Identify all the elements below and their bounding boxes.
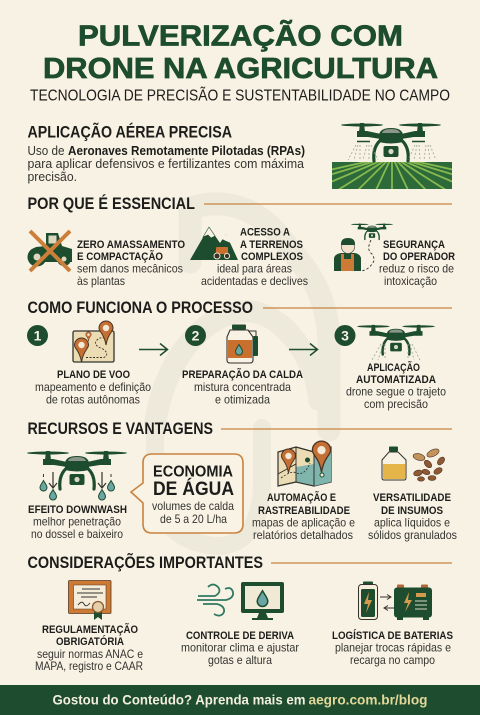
text: logística de baterias (332, 629, 453, 667)
step 3 number: 3 (341, 328, 349, 344)
text: aplicação automatizada: drone segue o trajeto (346, 384, 446, 398)
text: zero amassamento: E COMPACTAÇÃO (77, 250, 163, 263)
panel: aplicação aérea precisa (28, 122, 480, 190)
text: preparação da calda: mistura concentrada (194, 380, 291, 394)
arrow (289, 344, 318, 356)
text: versatilidade de insumos (368, 492, 457, 542)
footer banner: Gostou do Conteúdo? Aprenda mais em (52, 692, 306, 708)
text: efeito downwash: no dossel e baixeiro (31, 527, 123, 541)
text: efeito downwash (28, 504, 127, 541)
heading: CONSIDERAÇÕES IMPORTANTES (28, 552, 263, 572)
step 3 number (334, 325, 356, 346)
text: regulamentação (35, 623, 143, 673)
text: segurança do operador: SEGURANÇA (383, 239, 445, 251)
text: zero amassamento: às plantas (77, 274, 125, 288)
step 1 number: 1 (34, 328, 42, 344)
text: versatilidade de insumos: DE INSUMOS (381, 505, 443, 517)
panel: considerações importantes (28, 552, 453, 673)
text: preparação da calda: PREPARAÇÃO DA CALDA (182, 368, 303, 381)
icon: batteries and charger (358, 582, 432, 620)
text: automação e rastreabilidade: RASTREABILIDADE (258, 505, 350, 517)
text: automação e rastreabilidade: AUTOMAÇÃO E (267, 491, 336, 504)
footer banner: aegro.com.br/blog (308, 692, 428, 708)
text: efeito downwash: melhor penetração (33, 514, 121, 528)
icon: drone spraying field (332, 123, 452, 189)
text: logística de baterias: recarga no campo (350, 653, 435, 667)
title (43, 18, 438, 85)
text: aplicação automatizada: AUTOMATIZADA (356, 374, 436, 386)
text: aplicação automatizada: APLICAÇÃO (367, 361, 420, 374)
text: segurança do operador (379, 239, 455, 288)
heading: RECURSOS E VANTAGENS (28, 419, 213, 438)
text: aplicação automatizada: com precisão (364, 397, 428, 411)
icon: certificate (68, 580, 111, 620)
text block: para aplicar defensivos e fertilizantes com máxima (28, 156, 305, 171)
step 1 number (27, 325, 48, 346)
icon: monitor with drop (241, 582, 284, 620)
watermark: leaf (155, 204, 329, 546)
icon: wind (197, 584, 233, 616)
text block (28, 143, 305, 184)
heading: COMO FUNCIONA O PROCESSO (28, 298, 253, 317)
text: zero amassamento: ZERO AMASSAMENTO (77, 239, 185, 251)
text: zero amassamento (77, 239, 185, 288)
text: controle de deriva: gotas e altura (208, 653, 272, 667)
text: preparação da calda: e otimizada (215, 392, 270, 406)
title: PULVERIZAÇÃO COM (78, 18, 403, 52)
text: preparação da calda (182, 368, 303, 406)
text: acesso a terrenos (201, 226, 308, 288)
text: acesso a terrenos: ideal para áreas (217, 262, 292, 276)
text: controle de deriva: monitorar clima e ajustar (181, 640, 299, 654)
text: plano de voo (35, 369, 151, 406)
callout: economia de água: volumes de calda (152, 499, 234, 513)
text: acesso a terrenos: COMPLEXOS (241, 251, 303, 263)
text: versatilidade de insumos: sólidos granulados (368, 528, 457, 542)
text: segurança do operador: reduz o risco de (379, 262, 454, 276)
icon: mountains with tractor (190, 227, 238, 260)
text block: Uso de (28, 143, 64, 158)
text: zero amassamento: sem danos mecânicos (77, 262, 183, 276)
text: controle de deriva (181, 630, 299, 667)
text: regulamentação: REGULAMENTAÇÃO (42, 623, 138, 636)
icon: spray mix bottle (227, 324, 258, 363)
text: logística de baterias: LOGÍSTICA DE BATERIAS (332, 629, 453, 642)
callout: economia de água: DE ÁGUA (153, 477, 234, 500)
footer banner (0, 685, 480, 715)
step 2 number: 2 (192, 328, 200, 344)
text: acesso a terrenos: acidentadas e declives (201, 274, 308, 288)
text: plano de voo: mapeamento e definição (35, 380, 151, 394)
text: acesso a terrenos: ACESSO A (240, 226, 290, 238)
callout: economia de água: ECONOMIA (153, 464, 233, 480)
panel: como funciona o processo (27, 298, 452, 411)
title: DRONE NA AGRICULTURA (43, 53, 438, 85)
text: efeito downwash: EFEITO DOWNWASH (28, 504, 127, 516)
heading: APLICAÇÃO AÉREA PRECISA (28, 122, 232, 142)
text: automação e rastreabilidade: mapas de aplicação e (252, 516, 355, 530)
icon: flight plan map (73, 321, 114, 362)
text: regulamentação: OBRIGATÓRIA (56, 635, 124, 648)
arrow (139, 344, 168, 356)
panel: recursos e vantagens (27, 419, 457, 542)
icon: jug and granules (382, 446, 446, 481)
text: automação e rastreabilidade (252, 491, 355, 542)
icon: spraying drone (357, 325, 435, 360)
panel: por que é essencial (28, 194, 455, 288)
text: acesso a terrenos: A TERRENOS (240, 239, 303, 251)
text: controle de deriva: CONTROLE DE DERIVA (186, 630, 294, 642)
text: plano de voo: PLANO DE VOO (57, 369, 130, 381)
icon: crossed-out tractor (28, 231, 72, 271)
icon: downwash drone (27, 451, 127, 500)
step 2 number (185, 325, 206, 346)
text block: Aeronaves Remotamente Pilotadas (RPAs) (68, 143, 305, 158)
text: versatilidade de insumos: aplica líquidos e (374, 516, 450, 530)
callout: economia de água (131, 454, 243, 533)
text: regulamentação: seguir normas ANAC e (37, 647, 143, 661)
text: automação e rastreabilidade: relatórios detalhados (253, 528, 353, 542)
text block: precisão. (28, 169, 77, 184)
text: regulamentação: MAPA, registro e CAAR (35, 659, 143, 673)
icon: map with pins (278, 441, 331, 486)
heading: POR QUE É ESSENCIAL (28, 194, 195, 213)
text: plano de voo: de rotas autônomas (46, 392, 140, 406)
text: segurança do operador: intoxicação (384, 274, 437, 288)
icon: operator with drone (334, 224, 393, 271)
text: logística de baterias: planejar trocas rápidas e (335, 640, 451, 654)
text: versatilidade de insumos: VERSATILIDADE (373, 492, 451, 504)
text: aplicação automatizada (346, 361, 446, 411)
text: segurança do operador: DO OPERADOR (383, 251, 455, 263)
callout: economia de água: de 5 a 20 L/ha (160, 512, 227, 526)
